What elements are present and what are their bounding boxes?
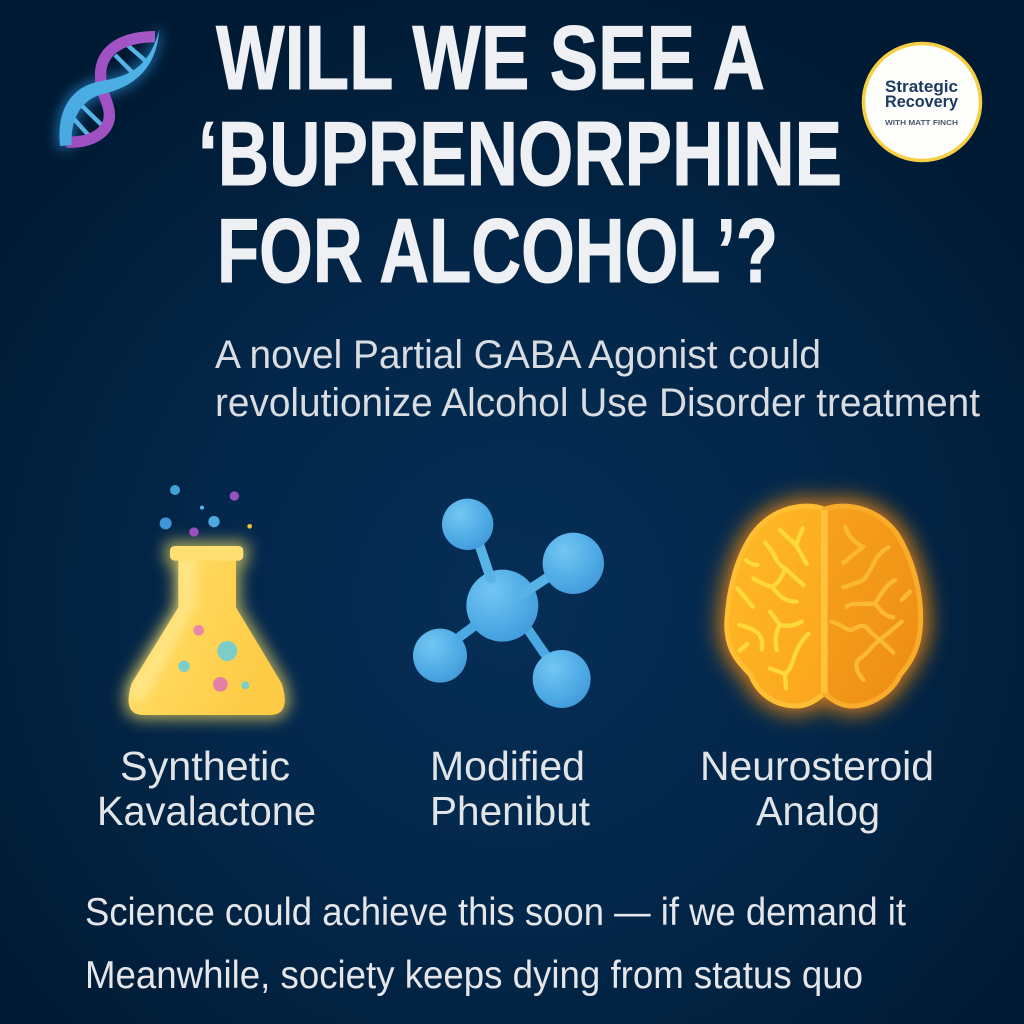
title: WILL WE SEE A (216, 8, 765, 109)
icon: brain (727, 506, 922, 706)
label: Modified Phenibut: Phenibut (430, 788, 591, 834)
label: Synthetic Kavalactone: Kavalactone (97, 788, 316, 834)
icon: DNA helix (59, 30, 159, 146)
title: ‘BUPRENORPHINE (198, 104, 842, 205)
label: Neurosteroid Analog (700, 743, 934, 834)
subtitle: revolutionize Alcohol Use Disorder treatment (215, 381, 980, 425)
closing statement: Science could achieve this soon — if we demand it (85, 891, 906, 934)
label: Synthetic Kavalactone: Synthetic (120, 743, 290, 789)
label: Neurosteroid Analog: Neurosteroid (700, 743, 934, 789)
closing statement: Meanwhile, society keeps dying from status quo (85, 954, 863, 997)
logo badge (864, 44, 980, 160)
title (198, 8, 842, 302)
logo badge: Strategic (885, 77, 958, 96)
label: Modified Phenibut (430, 743, 591, 834)
closing statement (85, 891, 906, 997)
subtitle (215, 333, 980, 425)
logo badge: WITH MATT FINCH (885, 120, 958, 127)
label: Neurosteroid Analog: Analog (756, 788, 880, 834)
label: Synthetic Kavalactone (97, 743, 316, 834)
title: FOR ALCOHOL’? (217, 201, 778, 302)
icon: molecule (413, 499, 604, 708)
logo badge: Recovery (885, 92, 959, 111)
subtitle: A novel Partial GABA Agonist could (215, 333, 821, 377)
icon: flask (129, 485, 285, 715)
label: Modified Phenibut: Modified (430, 743, 585, 789)
